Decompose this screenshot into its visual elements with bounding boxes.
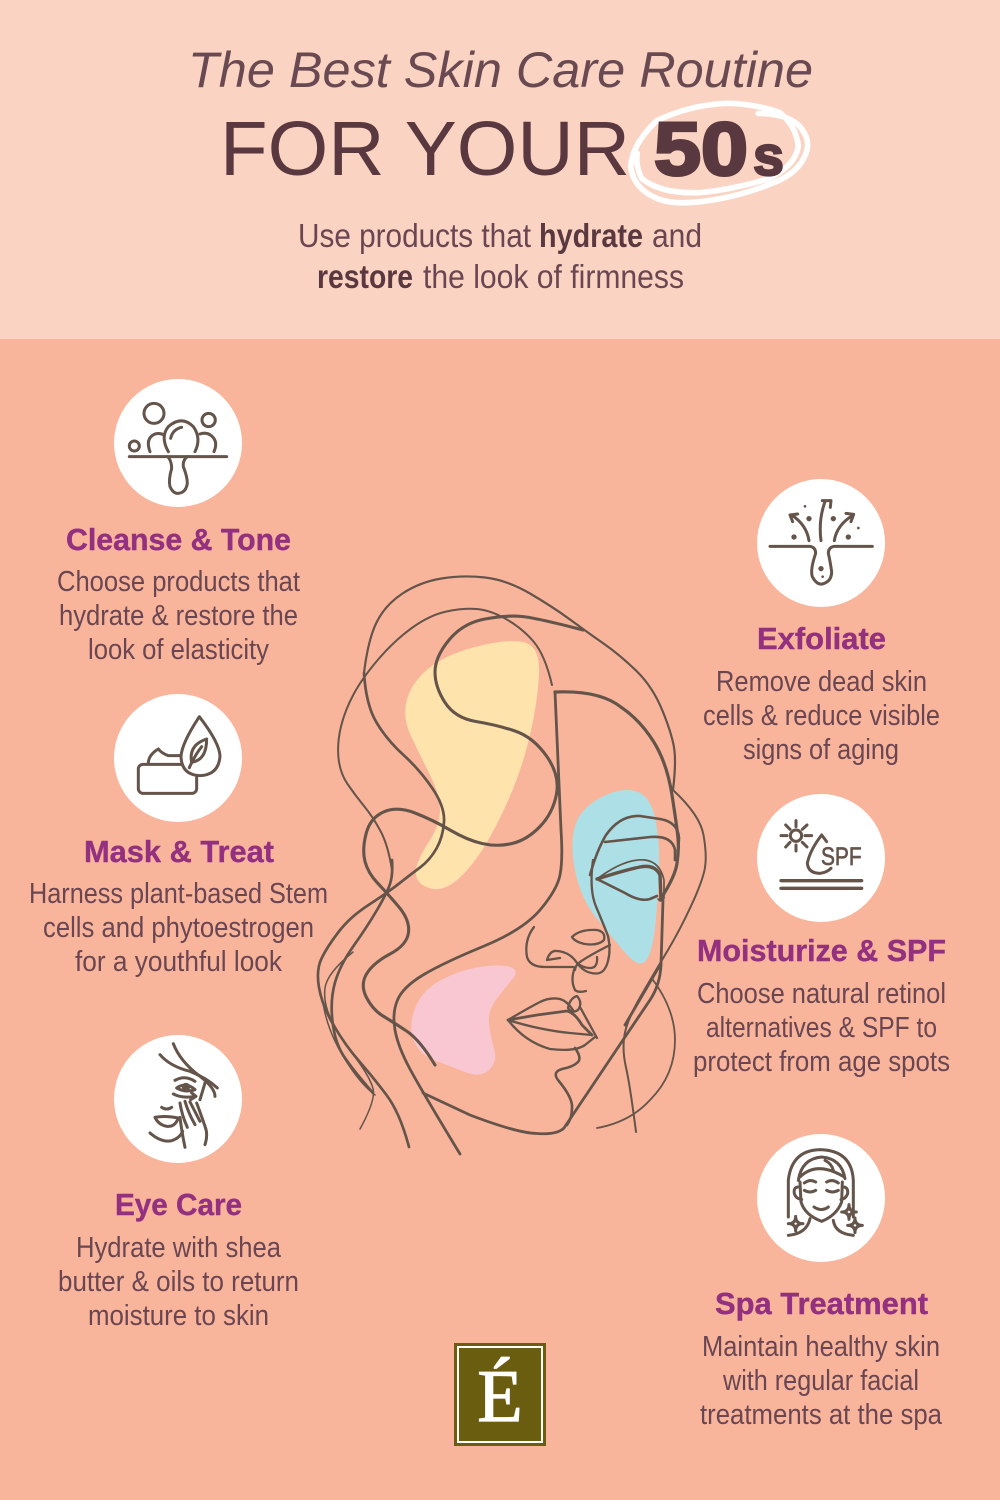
heading: Moisturize & SPF <box>697 933 946 968</box>
panel: moisturize and spf <box>693 794 950 1078</box>
white scribble around 50s <box>631 103 808 203</box>
panel: exfoliate <box>703 479 940 766</box>
icon: sun, drop and spf: SPF <box>821 843 862 871</box>
blue blob <box>572 790 659 963</box>
face illustration <box>318 576 706 1154</box>
body text: with regular facial <box>722 1365 919 1397</box>
body text: signs of aging <box>743 734 899 766</box>
panel: eye care <box>58 1035 299 1332</box>
body text <box>703 666 940 766</box>
body text: alternatives & SPF to <box>706 1012 937 1044</box>
icon: eye and hand <box>114 1035 242 1163</box>
body text: protect from age spots <box>693 1046 950 1078</box>
panel: cleanse and tone <box>57 379 300 666</box>
subtitle: restore <box>317 258 413 295</box>
body text: Choose products that <box>57 566 300 598</box>
heading: Spa Treatment <box>715 1286 928 1321</box>
body text: cells and phytoestrogen <box>43 912 314 944</box>
body text <box>700 1331 942 1431</box>
heading: Eye Care <box>115 1187 242 1222</box>
subtitle: Use products that <box>298 217 531 254</box>
title: 50s: 50 <box>654 107 748 191</box>
subtitle: hydrate <box>539 217 643 254</box>
icon: woman with headband <box>757 1134 885 1262</box>
subtitle: the look of firmness <box>423 258 684 295</box>
body text <box>693 978 950 1078</box>
eye <box>590 816 679 900</box>
body text: Harness plant-based Stem <box>29 878 328 910</box>
body text: cells & reduce visible <box>703 700 940 732</box>
body text: moisture to skin <box>88 1300 269 1332</box>
body text: Hydrate with shea <box>76 1232 281 1264</box>
hair lines <box>318 576 675 1147</box>
icon: sun, drop and spf <box>757 794 885 922</box>
body text <box>58 1232 299 1332</box>
title: 50s <box>654 107 784 191</box>
subtitle <box>298 217 702 295</box>
heading: Exfoliate <box>757 621 886 656</box>
body text: Remove dead skin <box>716 666 927 698</box>
title: italic line: The Best Skin Care Routine <box>188 42 813 98</box>
body text <box>57 566 300 666</box>
body text: for a youthful look <box>75 946 283 978</box>
icon: cream jar and leaf drop <box>114 694 242 822</box>
subtitle: and <box>652 217 702 254</box>
body text: Maintain healthy skin <box>702 1331 940 1363</box>
panel: spa treatment <box>700 1134 942 1431</box>
title: for your: FOR YOUR <box>220 106 630 192</box>
icon: cleanser foam <box>114 379 242 507</box>
title: 50s: s <box>753 124 784 187</box>
body text: hydrate & restore the <box>59 600 298 632</box>
panel: mask and treat <box>29 694 328 978</box>
yellow blob <box>405 641 539 889</box>
body text: butter & oils to return <box>58 1266 299 1298</box>
logo: É <box>477 1356 523 1438</box>
body text: treatments at the spa <box>700 1399 942 1431</box>
body text: Choose natural retinol <box>697 978 946 1010</box>
heading: Cleanse & Tone <box>66 522 291 557</box>
heading: Mask & Treat <box>84 834 274 869</box>
pink blob <box>411 966 516 1075</box>
face outline <box>394 692 706 1154</box>
lips <box>508 996 597 1125</box>
icon: pore with arrows <box>757 479 885 607</box>
body text: look of elasticity <box>88 634 270 666</box>
nose <box>526 860 610 992</box>
panel: header <box>0 0 1000 339</box>
logo <box>454 1343 546 1446</box>
body text <box>29 878 328 978</box>
